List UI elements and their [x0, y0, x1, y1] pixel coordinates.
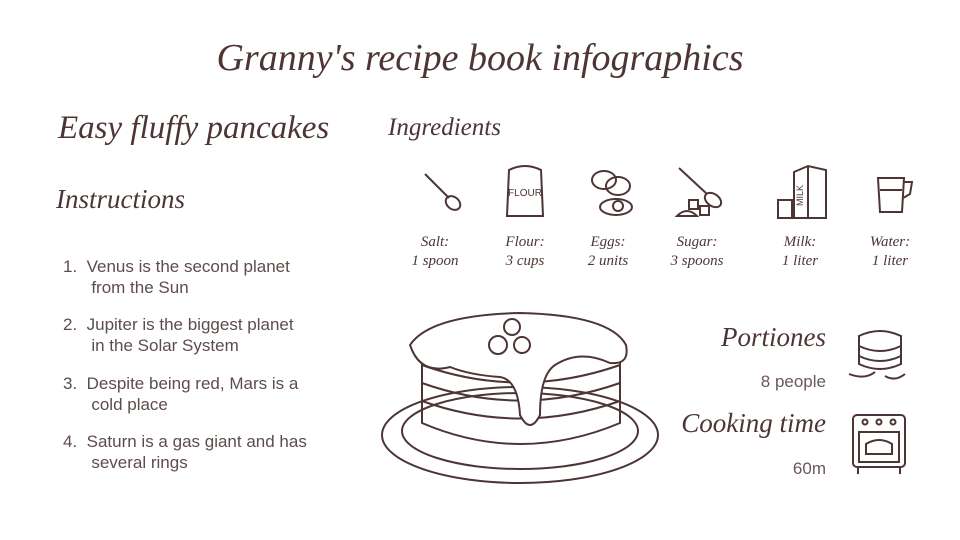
- ingredient: milk: Milk:: [784, 234, 816, 250]
- ingredient: salt: 1 spoon: [411, 253, 459, 269]
- recipe name: Easy fluffy pancakes: [58, 110, 329, 146]
- ingredient: milk: [777, 165, 827, 269]
- ingredient: milk: MILK: [795, 185, 805, 206]
- step 3: [63, 374, 298, 414]
- step 3: 3. Despite being red, Mars is a: [63, 374, 298, 393]
- ingredient: water: 1 liter: [872, 253, 908, 269]
- cooking time value: 60m: [793, 459, 826, 478]
- ingredient: flour: [505, 165, 545, 269]
- illustration: pancake stack: [381, 312, 659, 484]
- step 1: [63, 257, 290, 297]
- ingredient: sugar: [670, 167, 723, 269]
- ingredient: milk: 1 liter: [782, 253, 818, 269]
- step 2: [63, 315, 294, 355]
- step 3: cold place: [91, 395, 168, 414]
- icon: oven: [852, 414, 906, 474]
- step 4: [63, 432, 307, 472]
- step 1: from the Sun: [91, 278, 189, 297]
- cooking time label: Cooking time: [681, 408, 826, 438]
- ingredient: sugar: Sugar:: [677, 234, 717, 250]
- ingredient: water: Water:: [870, 234, 910, 250]
- cooking time: [681, 408, 906, 478]
- portions label: Portiones: [721, 322, 826, 352]
- instructions list: [63, 257, 307, 472]
- step 2: in the Solar System: [91, 336, 239, 355]
- ingredient: flour: FLOUR: [508, 188, 542, 199]
- portions value: 8 people: [761, 372, 826, 391]
- instructions heading: Instructions: [56, 184, 185, 214]
- step 2: 2. Jupiter is the biggest planet: [63, 315, 294, 334]
- ingredient: eggs: 2 units: [588, 253, 628, 269]
- step 4: 4. Saturn is a gas giant and has: [63, 432, 307, 451]
- ingredient: eggs: [588, 170, 633, 269]
- ingredient: salt: Salt:: [421, 234, 449, 250]
- ingredient: flour: Flour:: [505, 234, 545, 250]
- ingredient: eggs: Eggs:: [590, 234, 626, 250]
- step 4: several rings: [91, 453, 188, 472]
- ingredients heading: Ingredients: [388, 114, 501, 141]
- portions: [720, 322, 906, 391]
- title: Granny's recipe book infographics: [216, 37, 744, 79]
- ingredient: salt: [411, 173, 462, 269]
- ingredient: sugar: 3 spoons: [671, 253, 723, 269]
- step 1: 1. Venus is the second planet: [63, 257, 290, 276]
- icon: pancakes: [848, 330, 906, 380]
- ingredient: water: [870, 177, 914, 269]
- ingredient: flour: 3 cups: [506, 253, 544, 269]
